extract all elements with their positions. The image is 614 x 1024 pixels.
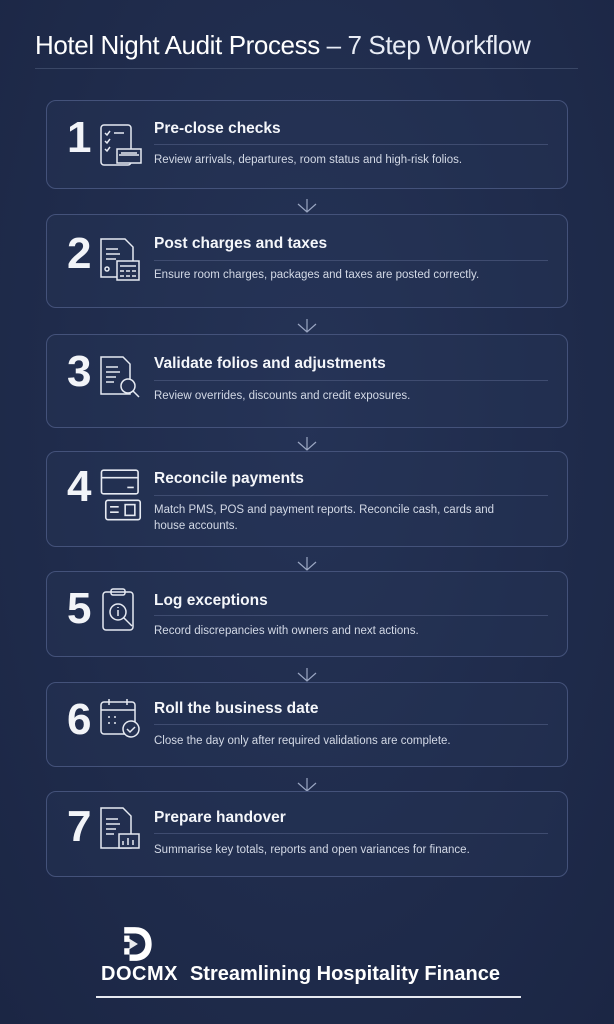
arrow: [298, 668, 316, 682]
card 5: [46, 571, 568, 657]
card 2: [46, 214, 568, 308]
heading 7: Prepare handover: [154, 809, 286, 826]
card 1: [46, 100, 568, 189]
arrow: [298, 437, 316, 451]
title: Hotel Night Audit Process – 7 Step Workflow: [35, 30, 530, 60]
arrow: [298, 319, 316, 333]
card 7: [46, 791, 568, 877]
heading 3: Validate folios and adjustments: [154, 355, 386, 372]
icon: document magnifier: [100, 356, 140, 398]
heading 2: Post charges and taxes: [154, 235, 327, 252]
description 6: Close the day only after required validations are complete.: [154, 735, 451, 747]
description 4: Match PMS, POS and payment reports. Reconcile cash, cards and house accounts.: [154, 504, 494, 532]
heading 6: Roll the business date: [154, 700, 319, 717]
card 4: 4: [67, 462, 91, 511]
heading 4: Reconcile payments: [154, 470, 304, 487]
card 7: 7: [67, 802, 91, 851]
icon: calendar check: [100, 699, 140, 738]
footer logo: [124, 927, 152, 961]
icon: checklist bed: [100, 124, 142, 166]
arrow: [298, 557, 316, 571]
icon: card and wallet: [100, 469, 142, 520]
description 1: Review arrivals, departures, room status and high-risk folios.: [154, 154, 462, 166]
card 5: 5: [67, 584, 91, 633]
description 3: Review overrides, discounts and credit exposures.: [154, 390, 410, 402]
card 3: 3: [67, 347, 91, 396]
icon: report chart: [100, 807, 140, 849]
heading 5: Log exceptions: [154, 592, 268, 609]
card 1: 1: [67, 113, 91, 162]
arrow: [298, 199, 316, 213]
card 3: [46, 334, 568, 428]
icon: document calculator: [100, 238, 140, 281]
footer brand text: DOCMX Streamlining Hospitality Finance: [101, 963, 500, 985]
heading 1: Pre-close checks: [154, 120, 281, 137]
description 5: Record discrepancies with owners and next actions.: [154, 625, 419, 637]
description 7: Summarise key totals, reports and open variances for finance.: [154, 844, 470, 856]
card 6: 6: [67, 695, 91, 744]
description 2: Ensure room charges, packages and taxes are posted correctly.: [154, 269, 479, 281]
icon: clipboard info: [102, 588, 134, 631]
arrow: [298, 778, 316, 791]
card 6: [46, 682, 568, 767]
card 4: [46, 451, 568, 547]
card 2: 2: [67, 229, 91, 278]
